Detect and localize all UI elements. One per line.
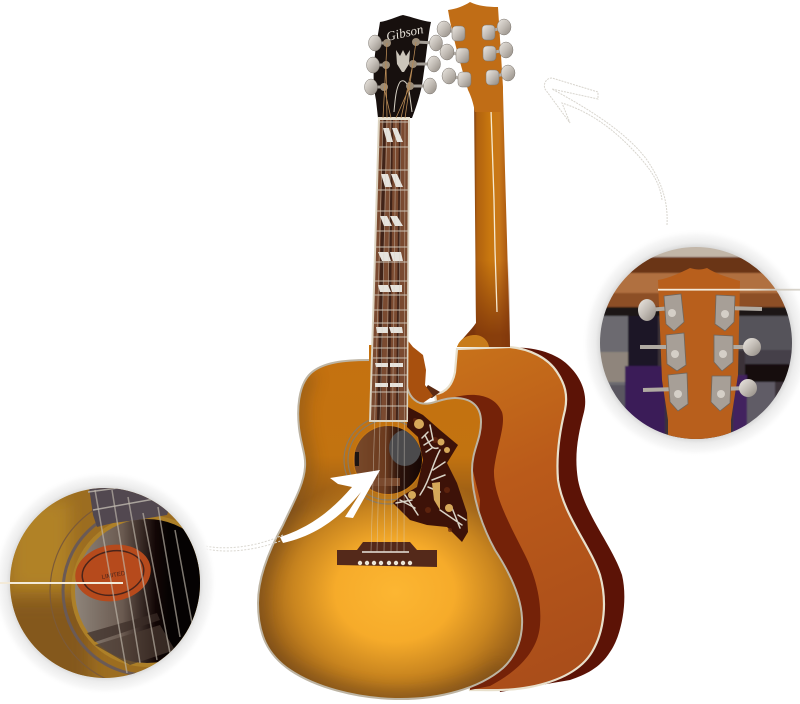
back guitar	[420, 2, 624, 692]
halo	[582, 229, 800, 457]
tortoise flecks	[413, 418, 452, 532]
front binding	[258, 360, 522, 699]
strings	[95, 490, 192, 673]
detail photo	[600, 247, 792, 439]
strings	[371, 120, 405, 552]
frets	[371, 122, 408, 406]
front heel	[405, 337, 433, 405]
internal label	[75, 544, 151, 602]
sound hole rings	[50, 494, 167, 678]
sunburst top	[259, 391, 522, 698]
pickguard	[393, 407, 468, 542]
halo	[0, 471, 217, 695]
left dotted arrow tail	[193, 535, 283, 551]
front tuners	[364, 35, 442, 95]
wood grain stripes	[377, 120, 401, 420]
internal label: LIMITED	[101, 571, 126, 581]
neck highlight	[491, 110, 497, 312]
fretboard	[369, 118, 410, 422]
rosette rings	[344, 416, 432, 504]
fretboard end	[89, 488, 168, 527]
sound hole	[71, 516, 200, 667]
front guitar	[250, 15, 540, 704]
front guitar side	[455, 395, 540, 690]
blurred background	[600, 247, 792, 439]
fret inlays	[375, 128, 403, 387]
headstock rear	[658, 268, 740, 440]
saddle	[362, 551, 409, 553]
tuner shafts	[640, 308, 762, 390]
headstock logo: Gibson	[385, 21, 425, 44]
bridge pins	[358, 561, 412, 565]
back guitar body	[435, 347, 604, 690]
callout: headstock detail	[582, 229, 800, 457]
back headstock	[448, 2, 503, 112]
hummingbird and floral inlay	[396, 425, 466, 528]
crown inlay	[396, 50, 410, 72]
front headstock	[374, 15, 431, 120]
soundhole	[353, 425, 423, 495]
neck lower shading	[457, 260, 510, 347]
lower hole shadow	[95, 625, 175, 665]
back side shadow strip	[420, 385, 440, 398]
back tuners	[437, 19, 515, 87]
back guitar side	[480, 348, 624, 692]
strings on headstock	[383, 42, 416, 118]
curved outline arrow pointing to back headstock	[544, 78, 667, 225]
pointer line	[658, 289, 800, 291]
white arrow pointing to soundhole	[280, 470, 380, 543]
bridge	[337, 542, 437, 567]
pointer line	[0, 582, 123, 584]
detail photo	[10, 488, 200, 678]
edge shading	[258, 374, 503, 699]
back neck	[457, 92, 510, 347]
tuner plates	[664, 294, 735, 411]
truss rod cover	[394, 81, 412, 112]
inner label	[389, 430, 421, 466]
tuner buttons	[638, 299, 761, 397]
nut	[378, 117, 410, 120]
interior brace	[87, 613, 160, 642]
heel dome	[457, 335, 489, 347]
callout: soundhole detail	[0, 478, 211, 688]
front guitar body	[259, 345, 522, 698]
